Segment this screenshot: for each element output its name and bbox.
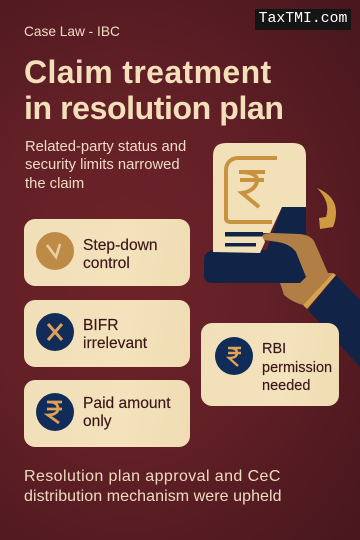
document bbox=[213, 143, 306, 253]
navy sleeve bbox=[308, 275, 360, 367]
label bbox=[83, 317, 148, 352]
label: BIFR bbox=[83, 317, 119, 334]
label: control bbox=[83, 255, 130, 272]
card: RBI permission bbox=[201, 323, 339, 406]
curved arrow bbox=[317, 188, 336, 229]
subtitle: Related-party status and bbox=[25, 139, 186, 155]
label: irrelevant bbox=[83, 335, 147, 352]
footer text: Resolution plan approval and CeC bbox=[24, 468, 281, 485]
label: Step-down bbox=[83, 237, 158, 254]
label: permission bbox=[262, 360, 332, 376]
label: RBI bbox=[262, 341, 286, 357]
footer text: distribution mechanism were upheld bbox=[24, 488, 282, 504]
subtitle bbox=[25, 139, 186, 192]
footer text bbox=[24, 468, 282, 504]
icon: rupee bbox=[215, 337, 253, 375]
label bbox=[262, 341, 332, 394]
subtitle: the claim bbox=[25, 176, 84, 192]
label: Paid amount bbox=[83, 395, 171, 412]
subtitle: security limits narrowed bbox=[25, 157, 180, 173]
label bbox=[83, 237, 158, 272]
illustration: hand holding document bbox=[204, 143, 360, 367]
cuff bbox=[303, 273, 336, 309]
rupee frame bbox=[226, 158, 277, 222]
category label: Case Law - IBC bbox=[24, 24, 120, 39]
navy folder bbox=[266, 207, 306, 252]
card: paid amount only bbox=[24, 380, 190, 447]
icon: down marker bbox=[36, 232, 74, 270]
label: only bbox=[83, 413, 112, 430]
title bbox=[24, 54, 283, 126]
navy tray bbox=[204, 250, 306, 283]
document lines bbox=[225, 232, 263, 236]
label: needed bbox=[262, 378, 310, 394]
hand bbox=[262, 233, 333, 305]
label bbox=[83, 395, 171, 430]
card: BIFR irrelevant bbox=[24, 300, 190, 367]
icon: rupee bbox=[36, 393, 74, 431]
title: in resolution plan bbox=[24, 90, 283, 126]
icon: cross bbox=[36, 313, 74, 351]
brand badge: TaxTMI.com bbox=[259, 11, 347, 27]
title: Claim treatment bbox=[24, 54, 272, 90]
card: step-down control bbox=[24, 219, 190, 286]
rupee glyph bbox=[239, 172, 265, 207]
